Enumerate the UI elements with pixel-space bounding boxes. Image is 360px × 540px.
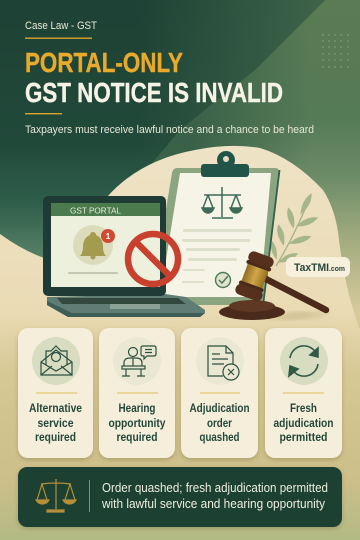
badge: TaxTMI.com: .com [329, 266, 345, 273]
card: hearing opportunity [99, 328, 175, 458]
conclusion text [101, 481, 328, 511]
conclusion text: with lawful service and hearing opportunity [101, 497, 326, 511]
illustration: gavel [219, 250, 330, 320]
document scales icon [202, 187, 242, 218]
card: adjudication quashed [181, 328, 258, 458]
eyebrow: Case Law - GST [25, 20, 97, 32]
clip [201, 151, 249, 177]
shadow [262, 312, 330, 319]
laptop base [47, 294, 205, 317]
card: hearing opportunity: required [116, 432, 158, 444]
card: hearing opportunity: opportunity [108, 418, 166, 430]
title [25, 47, 283, 108]
card: adjudication quashed: order [207, 418, 232, 430]
bell icon [73, 225, 115, 265]
badge: TaxTMI.com [286, 257, 350, 277]
sound block [219, 304, 285, 320]
card: hearing opportunity: Hearing [118, 403, 156, 415]
card: fresh adjudication: adjudication [274, 418, 334, 430]
card: alternative service [18, 328, 93, 458]
icon: gold scales [36, 479, 76, 512]
card: alternative service: service [38, 418, 74, 430]
bell icon: 1 [106, 232, 111, 241]
card: fresh adjudication [265, 328, 342, 458]
decorative dot grid [322, 34, 349, 68]
head [234, 250, 276, 302]
card: fresh adjudication: Fresh [290, 403, 317, 415]
document lines [182, 229, 252, 283]
card: adjudication quashed: quashed [200, 432, 240, 444]
illustration: laptop: GST PORTAL [70, 206, 121, 216]
icon: prohibition sign [128, 234, 178, 284]
badge: TaxTMI.com: TaxTMI [294, 262, 329, 274]
title: GST NOTICE IS INVALID [25, 77, 283, 108]
card: alternative service: Alternative [29, 403, 82, 415]
illustration: leaves [269, 192, 319, 266]
conclusion bar [18, 467, 342, 527]
check mark [216, 272, 230, 288]
title: PORTAL-ONLY [25, 47, 183, 78]
header [25, 20, 314, 136]
card: fresh adjudication: permitted [280, 432, 328, 444]
handle [264, 278, 326, 310]
illustration: laptop [43, 196, 205, 317]
icon: envelope [41, 346, 72, 375]
subtitle: Taxpayers must receive lawful notice and a chance to be heard [25, 124, 314, 136]
icon: refresh arrows [289, 346, 318, 376]
conclusion text: Order quashed; fresh adjudication permitted [102, 481, 328, 495]
card: alternative service: required [35, 432, 76, 444]
card: adjudication quashed: Adjudication [190, 403, 250, 415]
icon: speaker at podium [122, 346, 156, 376]
icon: document with cross [208, 346, 239, 380]
laptop screen [43, 196, 166, 296]
illustration: clipboard [151, 151, 280, 305]
